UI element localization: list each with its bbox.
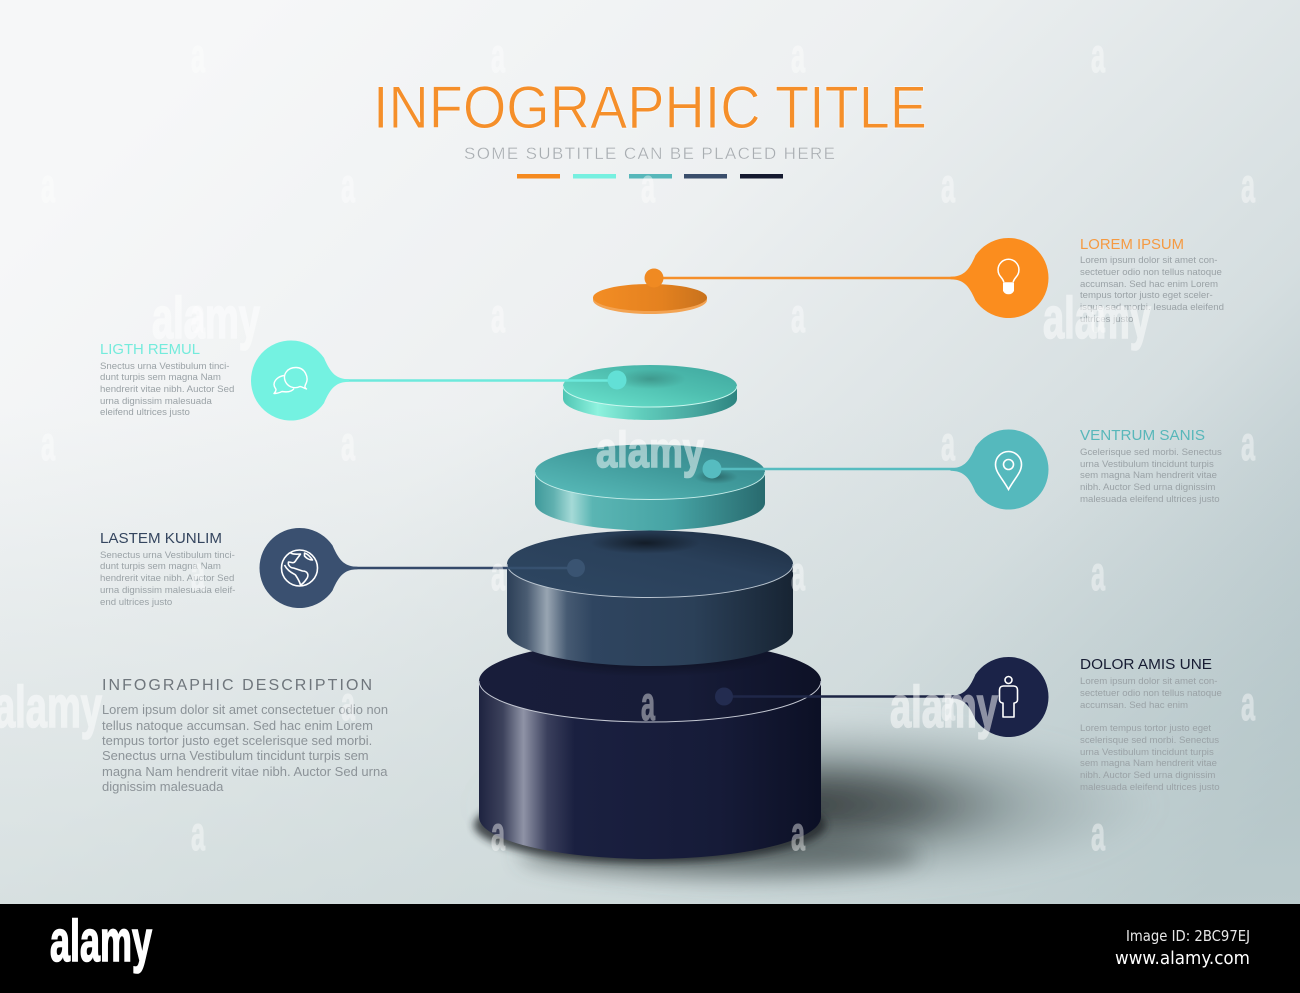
marker: speech bubbles <box>251 340 349 420</box>
watermark letters: a <box>191 548 205 601</box>
cylinder: orange disc <box>593 284 707 314</box>
watermark letters: a <box>791 548 805 601</box>
watermark letters: a <box>341 160 355 213</box>
watermark letters: a <box>191 808 205 861</box>
footer logo: alamy <box>50 909 152 974</box>
text block: dolor amis une: urna Vestibulum tincidunt turpis <box>1080 747 1214 758</box>
text block: dolor amis une: nibh. Auctor Sed urna dignissim <box>1080 770 1215 781</box>
watermark letters: a <box>641 160 655 213</box>
footer url: www.alamy.com <box>1115 948 1250 969</box>
text block: ligth remul <box>100 342 234 418</box>
icon: lightbulb <box>998 259 1019 294</box>
text block: ligth remul: urna dignissim malesuada <box>100 396 212 407</box>
watermark letters: a <box>491 808 505 861</box>
text block: infographic description: Senectus urna Vestibulum tincidunt turpis sem <box>102 748 369 763</box>
text block: lastem kunlim: dunt turpis sem magna Nam <box>100 561 221 572</box>
watermark letters: a <box>341 418 355 471</box>
text block: ventrum sanis: sem magna Nam hendrerit vitae <box>1080 470 1217 481</box>
watermark letters <box>41 30 1255 861</box>
text block: ligth remul: dunt turpis sem magna Nam <box>100 372 221 383</box>
title: INFOGRAPHIC TITLE <box>373 74 927 141</box>
text block: infographic description: tellus natoque accumsan. Sed hac enim Lorem <box>102 718 373 733</box>
marker: location pin <box>950 430 1049 510</box>
connector: orange disc <box>644 268 960 288</box>
text block: lastem kunlim: end ultrices justo <box>100 597 172 608</box>
text block: ligth remul: eleifend ultrices justo <box>100 407 190 418</box>
watermark letters: a <box>491 290 505 343</box>
text block: lorem ipsum: isque sed morbi. Iesuada eleifend <box>1080 302 1224 313</box>
subtitle: SOME SUBTITLE CAN BE PLACED HERE <box>464 144 835 163</box>
icon: person <box>1000 676 1018 717</box>
text block: dolor amis une: sectetuer odio non tellus natoque <box>1080 688 1222 699</box>
watermark logos <box>0 286 1151 740</box>
text block: lorem ipsum: ultrices justo <box>1080 314 1134 325</box>
text block: ventrum sanis <box>1080 428 1222 505</box>
watermark letters: a <box>941 418 955 471</box>
text block: ventrum sanis: malesuada eleifend ultrices justo <box>1080 494 1220 505</box>
text block: infographic description: tempus tortor justo eget scelerisque sed morbi. <box>102 733 372 748</box>
watermark logos: alamy <box>152 286 260 351</box>
cast shadow <box>470 717 1160 893</box>
text block: lastem kunlim: LASTEM KUNLIM <box>100 531 222 547</box>
text block: lorem ipsum: tempus tortor justo eget sceler- <box>1080 290 1213 301</box>
cylinder: base dark layer <box>479 633 821 859</box>
text block: infographic description: dignissim malesuada <box>102 779 224 794</box>
watermark letters: a <box>191 30 205 83</box>
text block: infographic description <box>102 677 388 794</box>
icon: globe <box>282 550 318 586</box>
footer image id: Image ID: 2BC97EJ <box>1126 927 1250 945</box>
watermark letters: a <box>341 678 355 731</box>
text block: dolor amis une: Lorem tempus tortor justo eget <box>1080 723 1211 734</box>
marker: lightbulb <box>950 238 1049 318</box>
cylinder: teal layer <box>535 444 765 530</box>
watermark letters: a <box>41 160 55 213</box>
text block: dolor amis une: Lorem ipsum dolor sit amet con- <box>1080 676 1217 687</box>
watermark letters: a <box>941 678 955 731</box>
watermark letters: a <box>1091 548 1105 601</box>
text block: ventrum sanis: VENTRUM SANIS <box>1080 428 1205 444</box>
text block: ligth remul: LIGTH REMUL <box>100 342 200 358</box>
colour key bars <box>517 174 783 178</box>
watermark logos: alamy <box>890 675 998 740</box>
text block: lorem ipsum: accumsan. Sed hac enim Lorem <box>1080 279 1218 290</box>
watermark letters: a <box>1241 678 1255 731</box>
watermark letters: a <box>941 160 955 213</box>
text block: lastem kunlim: urna dignissim malesuada eleif- <box>100 585 235 596</box>
icon: location pin <box>996 452 1022 490</box>
text block: ventrum sanis: nibh. Auctor Sed urna dignissim <box>1080 482 1215 493</box>
text block: lastem kunlim: Senectus urna Vestibulum tinci- <box>100 550 235 561</box>
text block: lorem ipsum <box>1080 237 1224 325</box>
cylinder: navy layer <box>507 530 793 666</box>
text block: ligth remul: Snectus urna Vestibulum tinci- <box>100 361 229 372</box>
watermark logos: alamy <box>1043 286 1151 351</box>
marker: person <box>950 657 1049 737</box>
text block: ligth remul: hendrerit vitae nibh. Auctor Sed <box>100 384 234 395</box>
text block: lorem ipsum: Lorem ipsum dolor sit amet con- <box>1080 255 1217 266</box>
text block: infographic description: magna Nam hendrerit vitae nibh. Auctor Sed urna <box>102 764 388 779</box>
watermark letters: a <box>791 808 805 861</box>
text block: dolor amis une: malesuada eleifend ultrices justo <box>1080 782 1220 793</box>
text block: dolor amis une: accumsan. Sed hac enim <box>1080 700 1188 711</box>
watermark logos: alamy <box>596 422 704 478</box>
connector: mint layer <box>330 370 626 390</box>
text block: dolor amis une: DOLOR AMIS UNE <box>1080 657 1212 673</box>
cylinder: mint layer <box>563 365 737 420</box>
marker: globe <box>259 528 358 608</box>
watermark letters: a <box>491 30 505 83</box>
text block: ventrum sanis: Gcelerisque sed morbi. Senectus <box>1080 447 1222 458</box>
watermark letters: a <box>1091 290 1105 343</box>
watermark letters: a <box>1091 30 1105 83</box>
connector: teal layer <box>702 460 960 478</box>
watermark letters: a <box>491 548 505 601</box>
watermark letters: a <box>191 290 205 343</box>
text block: lastem kunlim <box>100 531 235 608</box>
text block: dolor amis une: scelerisque sed morbi. Senectus <box>1080 735 1219 746</box>
text block: infographic description: INFOGRAPHIC DESCRIPTION <box>102 677 372 694</box>
watermark letters: a <box>1241 160 1255 213</box>
watermark letters: a <box>41 418 55 471</box>
watermark letters: a <box>791 290 805 343</box>
watermark letters: a <box>1091 808 1105 861</box>
icon: speech bubbles <box>274 368 307 394</box>
connector: navy layer <box>340 559 585 577</box>
text block: ventrum sanis: urna Vestibulum tincidunt turpis <box>1080 459 1214 470</box>
text block: lastem kunlim: hendrerit vitae nibh. Auctor Sed <box>100 573 234 584</box>
text block: lorem ipsum: sectetuer odio non tellus natoque <box>1080 267 1222 278</box>
footer bar <box>0 904 1300 993</box>
text block: lorem ipsum: LOREM IPSUM <box>1080 237 1184 253</box>
connector: dark layer <box>715 688 960 706</box>
watermark letters: a <box>791 30 805 83</box>
text block: infographic description: Lorem ipsum dolor sit amet consectetuer odio non <box>102 702 388 717</box>
text block: dolor amis une: sem magna Nam hendrerit vitae <box>1080 758 1217 769</box>
watermark letters: a <box>1241 418 1255 471</box>
text block: dolor amis une <box>1080 657 1222 793</box>
watermark letters: a <box>641 678 655 731</box>
